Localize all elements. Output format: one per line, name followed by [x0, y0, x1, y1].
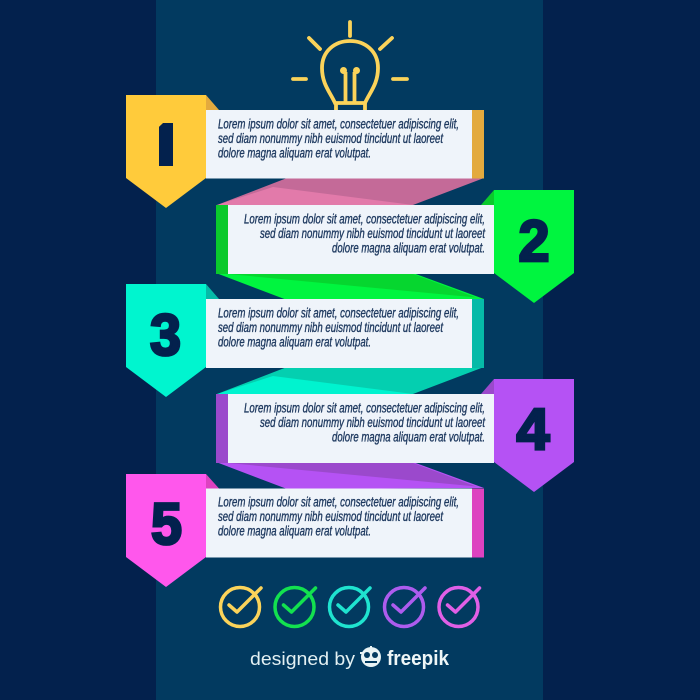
ribbon: pink connector	[217, 178, 484, 205]
step 3 text: Lorem ipsum dolor sit amet, consectetuer adipiscing elit,	[218, 306, 459, 321]
step 1 text: Lorem ipsum dolor sit amet, consectetuer adipiscing elit,	[218, 117, 459, 132]
number 2: 2	[518, 209, 550, 274]
icon: green check	[275, 588, 316, 626]
step 4 text: dolore magna aliquam erat volutpat.	[332, 429, 485, 444]
step 4 text: Lorem ipsum dolor sit amet, consectetuer adipiscing elit,	[244, 401, 485, 416]
step 2 panel	[216, 190, 574, 303]
step 4 text: sed diam nonummy nibh euismod tincidunt ut laoreet	[260, 415, 486, 430]
step 2 text: sed diam nonummy nibh euismod tincidunt ut laoreet	[260, 226, 486, 241]
step 3 text: dolore magna aliquam erat volutpat.	[218, 334, 371, 349]
footer credit: designed by	[250, 649, 355, 669]
step 3 panel	[126, 284, 484, 397]
icon: yellow check	[220, 588, 261, 626]
icon: freepik mascot	[360, 646, 381, 667]
step 5 text: sed diam nonummy nibh euismod tincidunt ut laoreet	[218, 509, 444, 524]
step 1 text: sed diam nonummy nibh euismod tincidunt ut laoreet	[218, 131, 444, 146]
step 5 text: Lorem ipsum dolor sit amet, consectetuer adipiscing elit,	[218, 495, 459, 510]
ribbon: green connector	[216, 273, 484, 300]
number 3: 3	[150, 303, 181, 368]
step 2 text: Lorem ipsum dolor sit amet, consectetuer adipiscing elit,	[244, 212, 485, 227]
step 1 text: dolore magna aliquam erat volutpat.	[218, 145, 371, 160]
center background panel	[156, 0, 543, 700]
step 2 text: dolore magna aliquam erat volutpat.	[332, 240, 485, 255]
icon: light bulb	[293, 22, 407, 111]
step 1 panel	[126, 95, 484, 208]
step 5 text: dolore magna aliquam erat volutpat.	[218, 523, 371, 538]
icon: purple check	[384, 588, 425, 626]
step 4 panel	[216, 379, 574, 492]
number 4: 4	[516, 397, 550, 462]
number 1: 1	[149, 112, 181, 177]
icon: pink check	[439, 588, 480, 626]
step 3 text: sed diam nonummy nibh euismod tincidunt ut laoreet	[218, 320, 444, 335]
check icons row	[220, 588, 480, 626]
footer credit: freepik	[387, 648, 450, 670]
footer credit	[250, 646, 450, 670]
ribbon: teal connector	[217, 367, 484, 394]
step 5 panel	[126, 474, 484, 587]
ribbon: purple connector	[216, 462, 484, 489]
icon: teal check	[330, 588, 370, 626]
number 5: 5	[151, 492, 182, 557]
